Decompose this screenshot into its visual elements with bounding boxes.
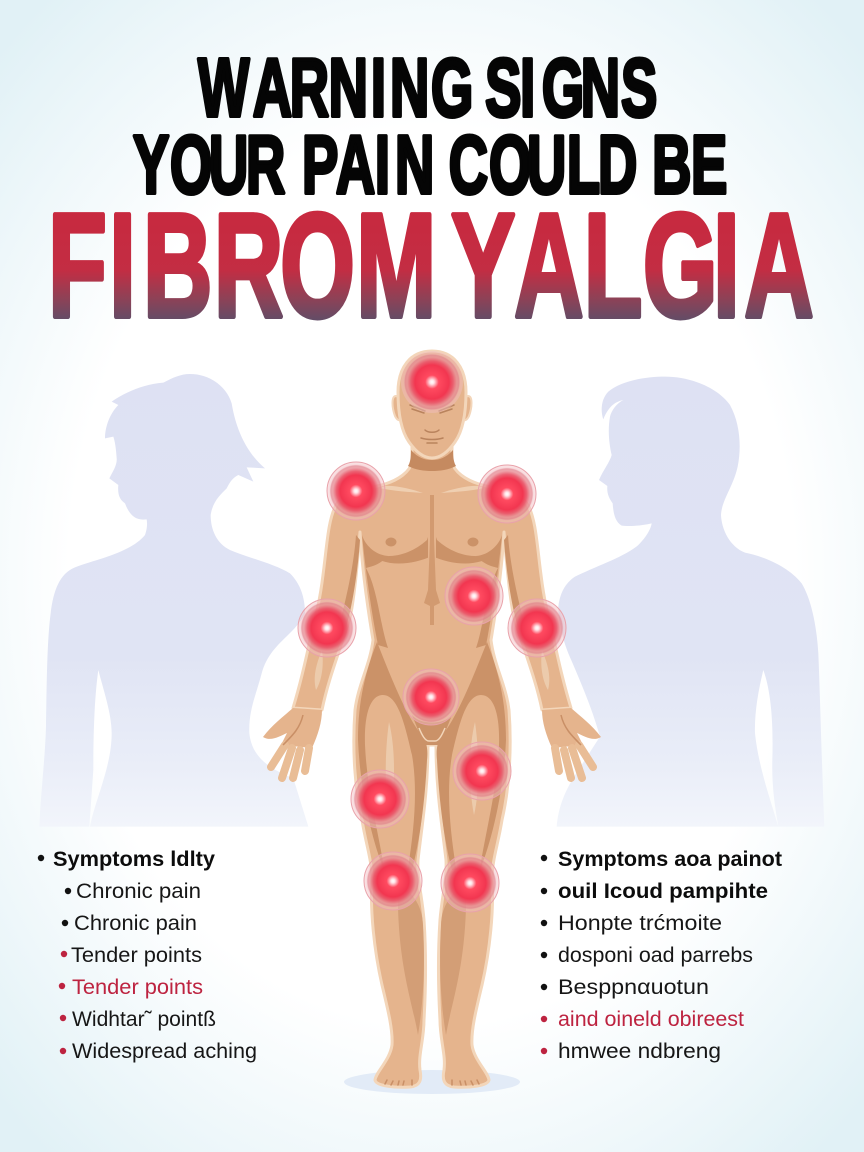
human figure	[263, 351, 601, 1087]
pain point: right knee	[441, 854, 499, 912]
pain point: pelvis	[403, 669, 459, 725]
left list item 4: Tender points	[72, 976, 203, 999]
left symptom list	[38, 848, 257, 1063]
pain point: head	[401, 351, 463, 413]
title word: fibromyalgia: FIBROMYALGIA	[48, 184, 814, 349]
groin line	[419, 728, 445, 741]
torso centre	[428, 445, 436, 727]
right list item 4: aind oineld obireest	[558, 1008, 744, 1031]
bullets	[541, 855, 547, 1054]
pain point: left shoulder	[327, 462, 385, 520]
left list heading: Symptoms ldlty	[53, 848, 215, 871]
right list heading: Symptoms aoa painot	[558, 848, 782, 871]
right list item 5: hmwee ndbreng	[558, 1040, 721, 1063]
pain point: left knee	[364, 852, 422, 910]
pain point: right elbow	[508, 599, 566, 657]
sternum line	[424, 495, 440, 625]
neck shadow	[408, 450, 456, 471]
pain point: right thigh	[453, 742, 511, 800]
left list item 3: Tender points	[71, 944, 202, 967]
title line: your pain could be: YOUR PAIN COULD BE	[133, 119, 727, 211]
pain point: right shoulder	[478, 465, 536, 523]
left list item 6: Widespread aching	[72, 1040, 257, 1063]
ground shadow	[344, 1070, 520, 1094]
right half of body	[432, 396, 601, 1087]
face details	[410, 405, 454, 443]
left list item 2: Chronic pain	[74, 912, 197, 935]
left background silhouette	[39, 374, 308, 827]
title	[48, 42, 814, 349]
head	[398, 351, 466, 458]
right list bold line: ouil Icoud pampihte	[558, 880, 768, 903]
right list item 2: dosponi oad parrebs	[558, 944, 753, 967]
title line: warning signs: WARNING SIGNS	[198, 42, 657, 134]
left half of body	[263, 396, 432, 1087]
left list item 1: Chronic pain	[76, 880, 201, 903]
pain point: left elbow	[298, 599, 356, 657]
pain points	[298, 351, 566, 912]
groin shading	[412, 715, 452, 745]
right background silhouette	[557, 377, 824, 827]
pain point: abdomen	[445, 567, 503, 625]
left list item 5: Widhtar˜ pointß	[72, 1008, 216, 1031]
right list item 1: Honpte trćmoite	[558, 912, 722, 935]
right list item 3: Besppnαuotun	[558, 976, 709, 999]
bullets	[38, 855, 71, 1054]
right symptom list	[541, 848, 782, 1063]
pain point: left thigh	[351, 770, 409, 828]
